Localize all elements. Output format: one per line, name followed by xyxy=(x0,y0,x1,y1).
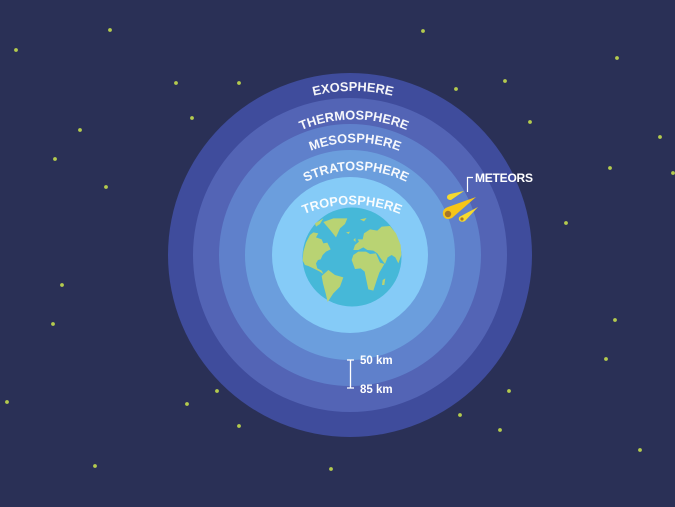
meteors bracket xyxy=(468,178,473,192)
label: meteors: METEORS xyxy=(475,171,533,185)
label: 85 km: 85 km xyxy=(360,384,393,396)
icon: meteors xyxy=(443,191,478,222)
label: mesosphere: MESOSPHERE xyxy=(308,134,402,151)
scale bar xyxy=(347,360,354,388)
label: exosphere: EXOSPHERE xyxy=(312,82,394,96)
ring: exosphere xyxy=(168,73,532,437)
ring: mesosphere xyxy=(219,124,481,386)
label: thermosphere: THERMOSPHERE xyxy=(298,110,410,130)
ring: thermosphere xyxy=(193,98,507,412)
atmosphere rings xyxy=(168,73,532,437)
ring: troposphere xyxy=(272,177,428,333)
label: 50 km: 50 km xyxy=(360,355,393,367)
label: troposphere: TROPOSPHERE xyxy=(301,196,402,214)
label: stratosphere: STRATOSPHERE xyxy=(303,161,410,182)
ring: stratosphere xyxy=(245,150,455,360)
icon: earth xyxy=(302,208,402,306)
